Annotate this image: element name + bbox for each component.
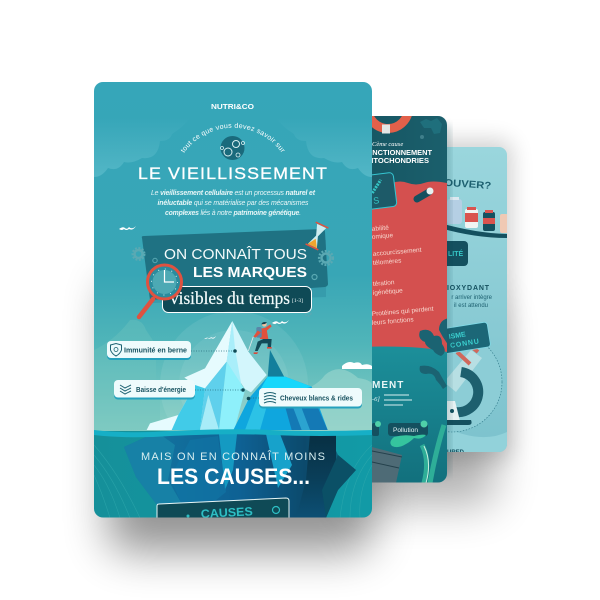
panel: back card, supplements xyxy=(447,147,507,452)
subtitle box: visibles du temps xyxy=(170,288,290,308)
banner xyxy=(142,229,328,300)
list: causes: leurs fonctions xyxy=(372,316,415,327)
teal lower section xyxy=(372,346,447,482)
list: causes: télomères xyxy=(373,257,402,267)
panel: middle card, mitochondria xyxy=(372,116,447,482)
heading: ment: MENT xyxy=(372,380,404,391)
text: antioxydant: IOXYDANT xyxy=(447,285,490,292)
heading: cause 2 xyxy=(372,142,432,163)
iceberg below water xyxy=(124,432,356,518)
intro paragraph xyxy=(151,190,316,217)
smoke xyxy=(419,318,449,389)
label: cheveux blancs et rides: Cheveux blancs & rides xyxy=(280,396,353,402)
badge: qualité xyxy=(447,241,468,266)
main title: LE VIEILLISSEMENT xyxy=(138,165,328,183)
list: causes: accourcissement xyxy=(373,247,422,258)
iceberg dark ridge xyxy=(268,350,284,377)
icon: cell xyxy=(220,136,244,160)
birds xyxy=(119,226,289,339)
list: causes: tération xyxy=(373,279,395,288)
heading: mais on en connaît moins: MAIS ON EN CONNAÎT MOINS xyxy=(141,450,325,463)
contour lines xyxy=(94,445,372,518)
label: baisse d'énergie xyxy=(114,380,245,400)
subtitle box: [1-3] xyxy=(292,298,303,304)
heading: on connaît tous: ON CONNAÎT TOUS xyxy=(164,246,307,263)
label: immunité xyxy=(107,341,237,360)
infographic stack xyxy=(79,82,526,581)
logo: NUTRI&CO xyxy=(211,102,254,111)
clouds right xyxy=(342,362,372,369)
tag: pollution xyxy=(372,420,428,436)
toxic spill xyxy=(390,435,426,447)
gears xyxy=(132,248,333,316)
seaweed xyxy=(422,425,444,483)
panel: front card xyxy=(94,82,372,518)
label: baisse d'énergie: Baisse d'énergie xyxy=(136,387,186,394)
causes box xyxy=(157,498,289,525)
halo rings and hills xyxy=(160,311,308,459)
magnifying glass xyxy=(139,265,182,317)
arched subtitle: tout ce que vous devez savoir sur xyxy=(180,122,285,152)
climber xyxy=(248,322,272,354)
label: immunité: Immunité en berne xyxy=(124,348,187,354)
intro paragraph: inéluctable qui se matérialise par des mécanismes xyxy=(158,200,309,207)
list: causes: Protéines qui perdent xyxy=(372,306,434,318)
badge: qualité: LITÉ xyxy=(448,249,463,258)
decorative text lines xyxy=(384,395,412,405)
intro paragraph: Le vieillissement cellulaire est un processus naturel et xyxy=(151,190,316,197)
heading: cause 2: FONCTIONNEMENT xyxy=(362,148,433,157)
label: cheveux blancs et rides xyxy=(247,388,362,408)
heading: cause 2: MITOCHONDRIES xyxy=(365,156,429,165)
list: causes xyxy=(372,225,434,327)
text: antioxydant: r arriver intègre xyxy=(451,295,493,301)
sky background xyxy=(94,82,372,432)
sea xyxy=(94,431,372,518)
card 2 shadow on card 3 xyxy=(441,125,450,475)
tag: pollution: Pollution xyxy=(393,427,418,434)
red section xyxy=(372,182,447,352)
list: causes: abilité xyxy=(372,225,389,233)
badge: organisme méconnu xyxy=(447,322,490,354)
lifebuoy xyxy=(372,116,412,134)
drop shadows xyxy=(108,140,512,552)
subtitle box xyxy=(162,286,312,312)
heading: cause 2: Cème cause xyxy=(372,141,403,148)
badge: organisme méconnu: CONNU xyxy=(450,338,479,350)
heading: les causes: LES CAUSES... xyxy=(157,464,310,489)
badge: organisme méconnu: ISME xyxy=(448,331,467,341)
text: antioxydant: il est attendu xyxy=(454,303,488,309)
list: causes: igénétique xyxy=(373,287,403,297)
text: fondé: URED xyxy=(447,450,465,456)
text: antioxydant xyxy=(448,285,492,307)
heading: les marques: LES MARQUES xyxy=(193,264,307,281)
coral xyxy=(420,118,442,134)
badge: dna: S xyxy=(373,195,380,206)
panel: middle card, mitochondria: -6] xyxy=(372,396,380,403)
water line xyxy=(94,429,372,437)
barrel xyxy=(372,447,402,483)
clouds top xyxy=(94,136,372,177)
supplement bottles xyxy=(447,197,508,233)
hourglass xyxy=(306,222,328,250)
pill xyxy=(417,188,434,199)
list: causes: omique xyxy=(372,232,394,241)
heading: trouver: TROUVER? xyxy=(429,177,492,192)
iceberg above water xyxy=(147,321,328,430)
intro paragraph: complexes liés à notre patrimoine génétique. xyxy=(165,210,301,217)
badge: dna xyxy=(372,172,398,210)
shelf xyxy=(447,225,507,238)
microscope xyxy=(447,348,502,432)
causes box: CAUSES xyxy=(200,504,253,521)
banner shadow xyxy=(150,240,326,303)
